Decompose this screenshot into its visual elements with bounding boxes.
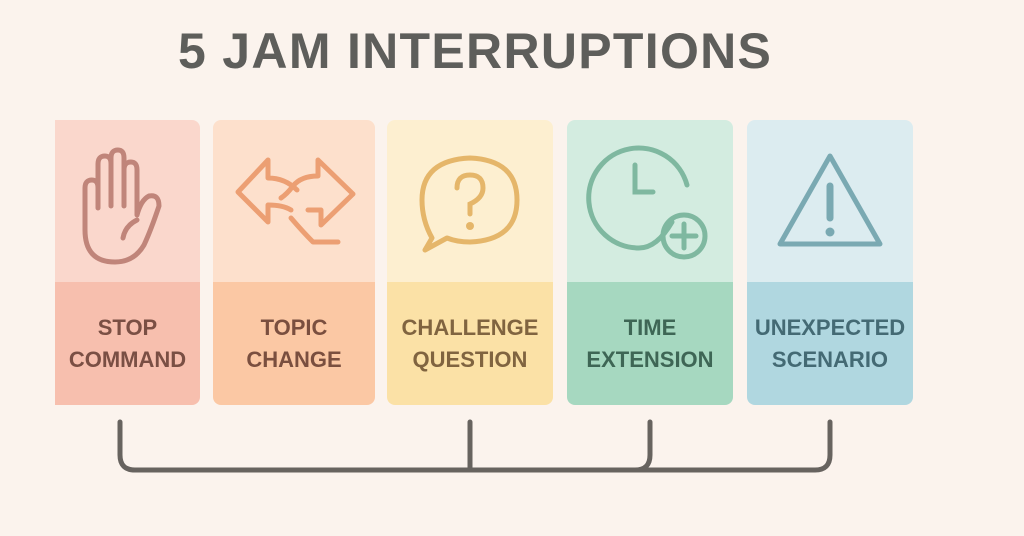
icon: swap arrows xyxy=(236,158,356,244)
panel: topic change: TOPIC xyxy=(261,314,327,340)
icon: question bubble xyxy=(420,156,520,252)
panel: stop command: COMMAND xyxy=(69,346,186,372)
panel: challenge question: CHALLENGE xyxy=(402,314,538,340)
panel: stop command: STOP xyxy=(98,314,157,340)
title: 5 JAM INTERRUPTIONS xyxy=(178,23,772,79)
panel: topic change: CHANGE xyxy=(246,346,342,372)
panel: time extension: TIME xyxy=(624,314,676,340)
panel: unexpected scenario: UNEXPECTED xyxy=(755,314,905,340)
panel: challenge question: QUESTION xyxy=(413,346,527,372)
panel: stop command xyxy=(55,120,200,405)
panel: unexpected scenario: SCENARIO xyxy=(772,346,888,372)
icon: hand xyxy=(82,148,162,264)
panel: time extension: EXTENSION xyxy=(586,346,714,372)
icon: warning triangle xyxy=(778,154,882,246)
panel: challenge question xyxy=(387,120,553,405)
panel: topic change xyxy=(213,120,375,405)
icon: clock plus xyxy=(586,146,708,260)
panel: time extension xyxy=(567,120,733,405)
panel: unexpected scenario xyxy=(747,120,913,405)
